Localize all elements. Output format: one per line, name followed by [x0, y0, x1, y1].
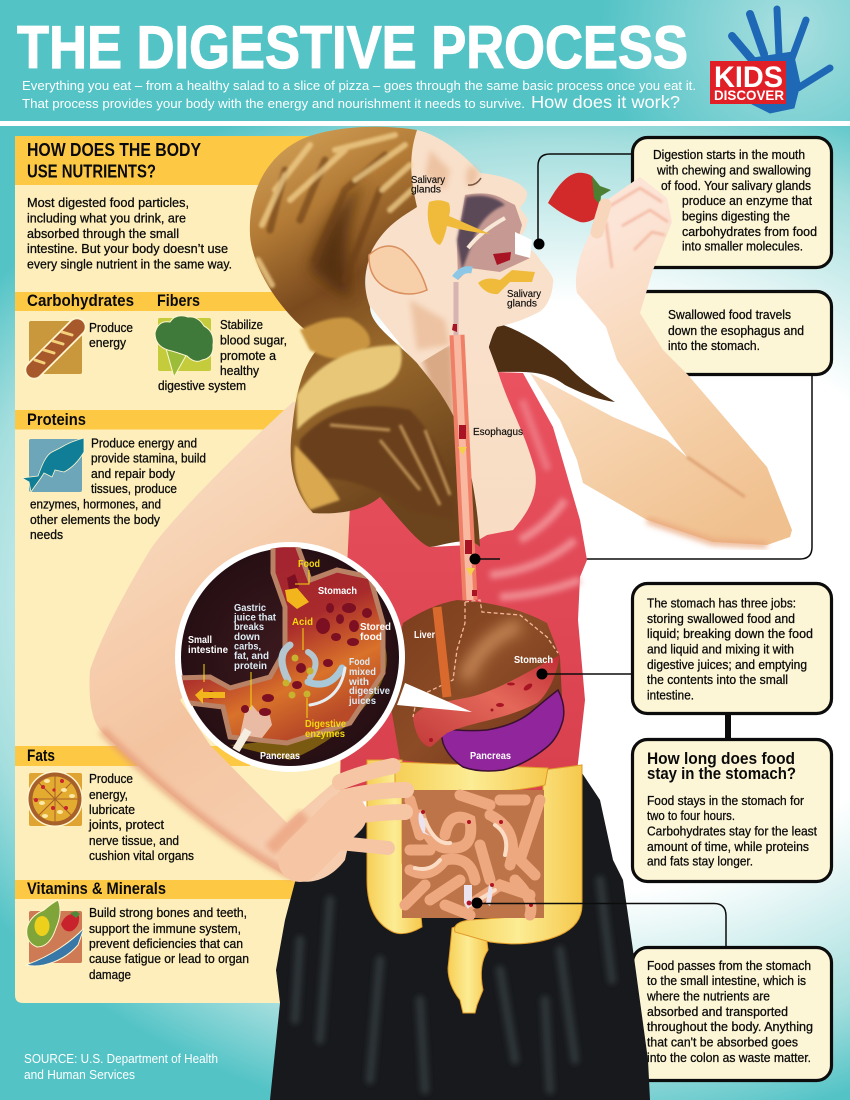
food pieces in the stomach [207, 574, 372, 716]
fibers text: blood sugar, [220, 332, 287, 348]
panel heading: USE NUTRIENTS? [27, 162, 156, 182]
carbohydrates and fibers band: Fibers [157, 292, 200, 310]
neck shadow [420, 340, 462, 470]
title: THE DIGESTIVE PROCESS [17, 14, 688, 81]
label: Gastric juice: juice that [233, 612, 276, 624]
callout: mouth: with chewing and swallowing [656, 163, 811, 178]
label: Pancreas: Pancreas [470, 750, 511, 762]
label: Stored food: food [360, 631, 382, 643]
intro text: Everything you eat – from a healthy salad to a slice of pizza – goes through the same basic process once you eat it. [22, 78, 696, 93]
source credit: and Human Services [24, 1067, 135, 1082]
tank top [340, 372, 587, 790]
callout: how long does food stay in the stomach: stay in the stomach? [647, 764, 796, 783]
colon [367, 760, 582, 1013]
vitamins and minerals band [15, 880, 320, 899]
label: Food mixed with digestive juices: juices [348, 695, 376, 707]
fats text: lubricate [89, 802, 135, 817]
fats text: joints, protect [88, 817, 164, 832]
callout: how long does food stay in the stomach: Food stays in the stomach for [647, 793, 805, 808]
intro paragraph: absorbed through the small [27, 226, 179, 241]
logo box: DISCOVER [714, 87, 784, 103]
callout: how long does food stay in the stomach: two to four hours. [647, 808, 735, 823]
upper stomach dashed outline [413, 600, 558, 717]
gastric glands [240, 705, 272, 738]
proteins band [15, 410, 320, 430]
icon: pizza [27, 771, 83, 827]
callout: mouth: of food. Your salivary glands [661, 178, 811, 193]
ear [369, 246, 427, 294]
intro text: That process provides your body with the energy and nourishment it needs to survive. [22, 96, 525, 111]
callout: stomach jobs [632, 584, 832, 714]
label: Salivary glands, lower [507, 288, 542, 310]
label: Digestive enzymes: enzymes [305, 728, 345, 740]
fibers text: digestive system [158, 378, 246, 393]
logo: Kids Discover [710, 9, 830, 113]
label: Gastric juice: fat, and [234, 650, 269, 662]
panel heading [15, 136, 320, 185]
vitamins and minerals band: Vitamins & Minerals [27, 880, 166, 898]
carbohydrates text: energy [89, 335, 126, 350]
stomach cross-section [175, 545, 383, 743]
callout: stomach jobs: liquid; breaking down the food [647, 626, 813, 641]
callout: esophagus: down the esophagus and [668, 323, 804, 338]
callout: small intestine: to the small intestine, which is [647, 973, 806, 988]
callout: small intestine: into the colon as waste matter. [647, 1050, 811, 1065]
face shading [410, 150, 478, 350]
chest and neck [400, 345, 536, 545]
pointer wedge [397, 683, 472, 712]
callout: esophagus: Swallowed food travels [668, 307, 791, 322]
salivary glands, jaw [478, 270, 535, 294]
fats band [15, 746, 250, 766]
vitamins text: prevent deficiencies that can [89, 936, 243, 951]
icon: blue hand [732, 9, 830, 113]
intro paragraph: including what you drink, are [27, 210, 186, 226]
fats text: energy, [89, 787, 128, 802]
organs [367, 600, 582, 1013]
salivary glands, cheek [428, 200, 490, 245]
vitamins text: support the immune system, [89, 921, 241, 936]
connector between stomach callouts [725, 714, 731, 740]
label: Small intestine [188, 634, 228, 656]
label: Acid: Acid [292, 616, 313, 628]
proteins text [30, 436, 206, 542]
near arm and hand reaching to the mouth [530, 177, 792, 545]
callout: small intestine: throughout the body. Anything [647, 1019, 813, 1034]
intro text [22, 78, 696, 112]
fats text [88, 771, 194, 863]
icon: bread [29, 321, 82, 374]
callout: stomach jobs: and liquid and mixing it with [647, 642, 794, 657]
closed eye [468, 178, 481, 185]
callout: how long does food stay in the stomach: Carbohydrates stay for the least [647, 824, 817, 839]
callout: small intestine: that can't be absorbed goes [647, 1035, 798, 1050]
callout: mouth: Digestion starts in the mouth [653, 147, 805, 162]
label: Stomach: Stomach [318, 585, 357, 597]
pancreas crescent [230, 640, 387, 760]
callout: stomach jobs: the contents into the small [647, 672, 788, 687]
carbohydrates text: Produce [89, 320, 133, 335]
callout: small intestine: Food passes from the stomach [647, 958, 811, 973]
back, shoulder and far arm [89, 402, 440, 882]
icon: broccoli [155, 316, 213, 377]
churning arrows [282, 645, 345, 705]
label: Salivary glands, upper: glands [411, 184, 441, 196]
callout: stomach jobs: storing swallowed food and [647, 611, 795, 626]
source credit: SOURCE: U.S. Department of Health [24, 1051, 218, 1066]
fibers text: promote a [220, 348, 277, 363]
label: Gastric juice: carbs, [234, 640, 261, 652]
label: Food mixed with digestive juices: mixed [349, 666, 376, 678]
intro paragraph: intestine. But your body doesn’t use [27, 241, 228, 256]
label: Salivary glands, lower: Salivary [507, 288, 542, 300]
callout: esophagus [632, 292, 832, 374]
carbohydrates text [89, 320, 133, 350]
intro paragraph: every single nutrient in the same way. [27, 256, 232, 272]
near hand thumb in front of strawberry [597, 205, 605, 232]
lens interior [181, 548, 399, 766]
intro paragraph: Most digested food particles, [27, 195, 189, 210]
label: Pancreas in lens: Pancreas [260, 750, 300, 762]
vitamins text: Build strong bones and teeth, [89, 905, 247, 920]
label: Food mixed with digestive juices: with [348, 676, 369, 688]
white arrow from pancreas [236, 730, 248, 750]
icon: avocado, strawberry and fish [26, 900, 84, 966]
callout: mouth: produce an enzyme that [682, 193, 812, 208]
label: Salivary glands, upper: Salivary [411, 174, 446, 186]
carbohydrates and fibers band [15, 292, 320, 311]
callout: how long does food stay in the stomach: and fats stay longer. [647, 854, 753, 869]
proteins text: enzymes, hormones, and [30, 496, 161, 512]
leader: stomach [536, 668, 631, 680]
panel: how does the body use nutrients [15, 136, 345, 1003]
label: Food mixed with digestive juices [348, 656, 390, 707]
callout: mouth: carbohydrates from food [682, 224, 817, 239]
small intestine [402, 790, 544, 918]
callout: small intestine: absorbed and transported [647, 1004, 788, 1019]
small intestine arrow [195, 688, 225, 704]
proteins text: tissues, produce [91, 481, 177, 496]
vitamins text [89, 905, 249, 982]
callout: how long does food stay in the stomach [632, 740, 832, 882]
strawberry [548, 173, 611, 222]
stomach food pieces [429, 682, 534, 742]
label: Gastric juice: down [234, 631, 260, 643]
proteins band: Proteins [27, 411, 86, 429]
proteins text: needs [30, 527, 63, 542]
stomach [413, 655, 560, 747]
white lens ring [175, 542, 405, 772]
callout: mouth: into smaller molecules. [682, 239, 803, 254]
callout: how long does food stay in the stomach: How long does food [647, 749, 795, 768]
vitamins text: cause fatigue or lead to organ [89, 951, 249, 966]
hair strand behind neck [488, 323, 615, 402]
callout: small intestine: where the nutrients are [646, 989, 770, 1004]
icon: fish [22, 438, 84, 492]
label: Food mixed with digestive juices: Food [349, 656, 370, 668]
fats text: nerve tissue, and [89, 833, 179, 848]
label: Salivary glands, lower: glands [507, 298, 537, 310]
far hand on the hip [300, 766, 406, 860]
callout: stomach jobs: digestive juices; and emptying [647, 657, 807, 672]
fibers text: healthy [220, 363, 259, 378]
esophagus [452, 270, 477, 600]
proteins text: provide stamina, build [91, 450, 206, 466]
proteins text: other elements the body [30, 512, 160, 527]
label: Gastric juice: breaks [234, 621, 264, 633]
label: Small intestine: Small [188, 634, 212, 646]
label: Digestive enzymes [305, 718, 346, 740]
liver and stomach cavity [388, 600, 563, 772]
label: Gastric juice [233, 602, 276, 672]
callout: how long does food stay in the stomach: amount of time, while proteins [647, 839, 809, 854]
fats text: Produce [89, 771, 133, 786]
carbohydrates and fibers band: Carbohydrates [27, 292, 134, 310]
fibers text: Stabilize [220, 317, 263, 332]
pancreas [440, 690, 564, 771]
panel heading: HOW DOES THE BODY [27, 140, 201, 160]
callout: stomach jobs: The stomach has three jobs: [647, 596, 796, 611]
callout: esophagus: into the stomach. [668, 338, 760, 353]
label: Salivary glands, upper [411, 174, 446, 196]
magnified stomach view [175, 542, 472, 772]
fats band: Fats [27, 747, 55, 765]
source credit [24, 1051, 218, 1082]
callout: mouth [632, 138, 832, 268]
head [365, 130, 553, 365]
skirt [270, 770, 650, 1100]
callout: mouth: begins digesting the [682, 209, 790, 224]
label: Small intestine: intestine [188, 644, 228, 656]
bile duct [437, 607, 447, 697]
leader: mouth [538, 154, 631, 244]
callout label leader lines [204, 570, 309, 718]
enzyme dots [282, 654, 314, 698]
intro paragraph [27, 195, 232, 272]
hair [250, 127, 480, 547]
proteins text: Produce energy and [91, 436, 197, 450]
label: Stomach: Stomach [514, 654, 553, 666]
vitamins text: damage [89, 967, 131, 982]
yellow food arrow [285, 588, 309, 609]
label: Gastric juice: protein [234, 660, 267, 672]
fibers text [158, 317, 287, 393]
label: Food: Food [298, 558, 320, 570]
mouth cross-section [457, 193, 532, 280]
intro text: How does it work? [531, 92, 680, 112]
label: Digestive enzymes: Digestive [305, 718, 346, 730]
leader: esophagus [475, 376, 812, 559]
callout: stomach jobs: intestine. [647, 688, 694, 703]
callout: small intestine [632, 948, 832, 1080]
marker dot: esophagus [470, 554, 500, 564]
logo box: KIDS [714, 61, 783, 94]
proteins text: and repair body [91, 466, 175, 481]
fats text: cushion vital organs [89, 848, 194, 863]
marker dot: mouth [534, 238, 544, 250]
label: Food mixed with digestive juices: digestive [349, 685, 390, 697]
label: Gastric juice: Gastric [234, 602, 266, 614]
label: Stored food [360, 621, 391, 643]
header band [0, 0, 850, 126]
illustration: girl eating a strawberry [89, 127, 792, 1100]
leader: small intestine [472, 898, 726, 946]
liver highlight [465, 625, 520, 680]
label: Liver: Liver [414, 629, 435, 641]
label: Stored food: Stored [360, 621, 391, 633]
label: Esophagus: Esophagus [473, 426, 523, 438]
